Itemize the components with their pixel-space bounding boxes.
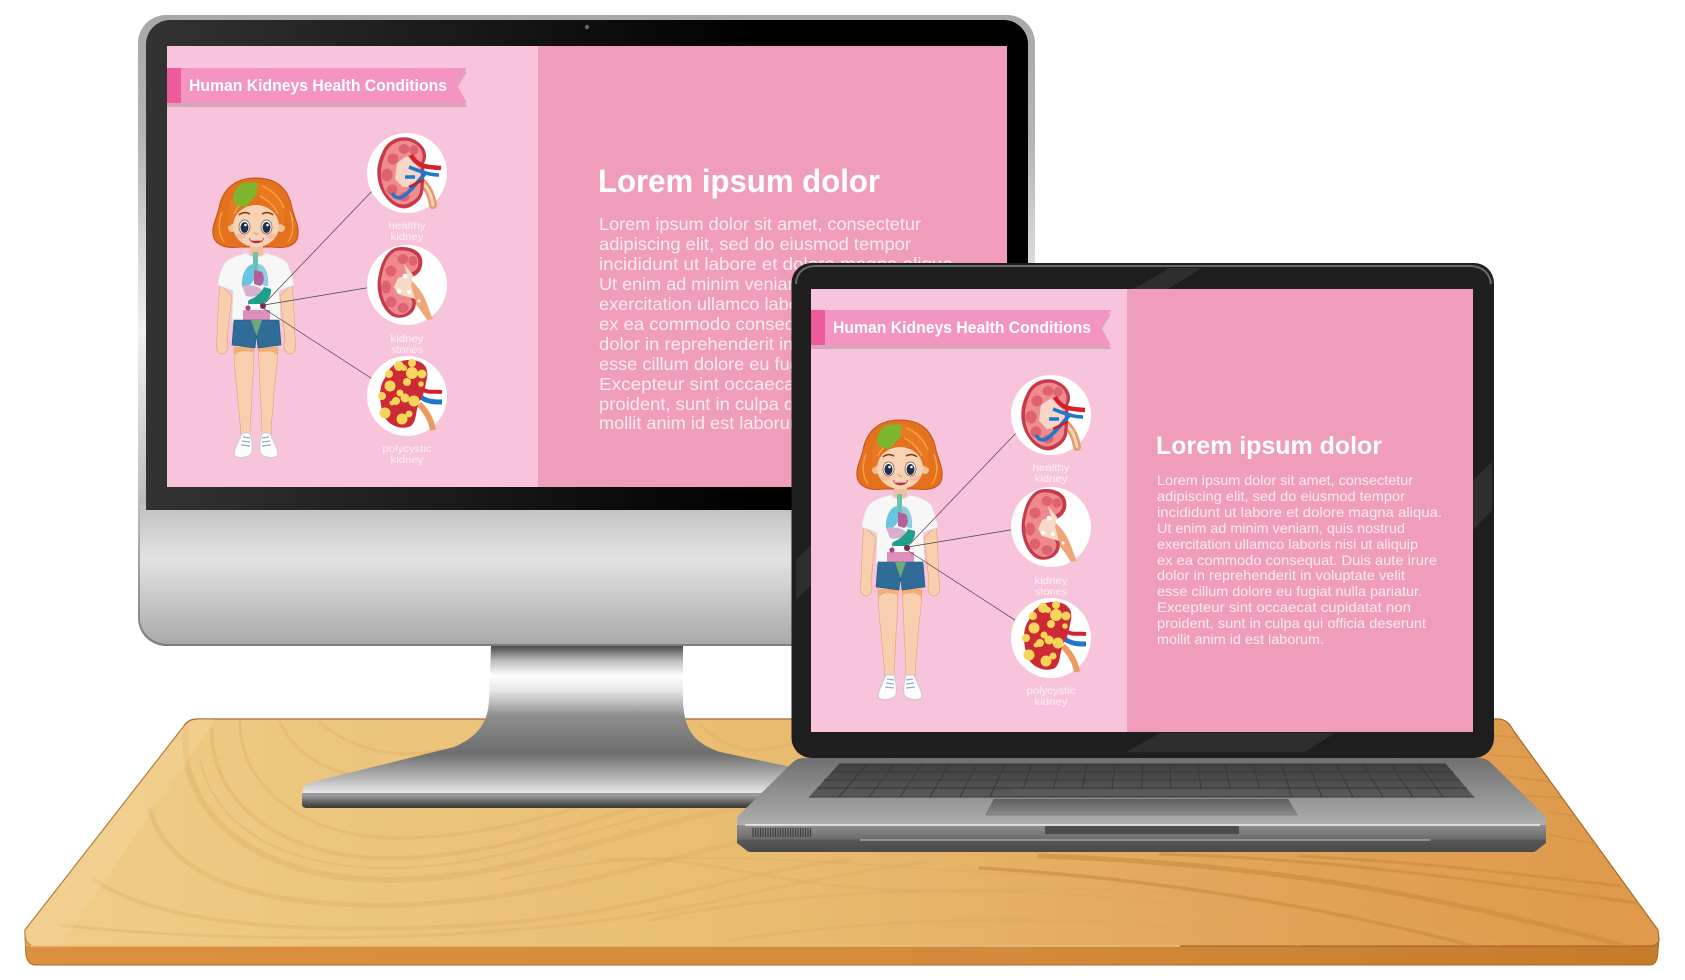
laptop base deck — [737, 758, 1546, 825]
monitor kidney: healthy: kidney — [390, 232, 424, 243]
desk front light edge — [30, 945, 1180, 947]
desk — [25, 719, 1659, 965]
laptop body text: adipiscing elit, sed do eiusmod tempor — [1157, 488, 1405, 504]
laptop kidney: healthy: kidney — [1034, 474, 1068, 485]
laptop kidney: stones: stones — [1035, 587, 1067, 598]
monitor body text: adipiscing elit, sed do eiusmod tempor — [599, 234, 911, 254]
monitor screen: left panel — [167, 46, 538, 487]
laptop girl anatomy figure — [857, 420, 942, 700]
monitor kidney: stones: stones — [391, 345, 423, 356]
laptop body text: Lorem ipsum dolor sit amet, consectetur — [1157, 472, 1413, 488]
monitor body text: ex ea commodo consequat. Duis aute irure — [599, 314, 951, 334]
monitor title banner — [167, 68, 467, 107]
laptop kidney: stones — [1011, 487, 1091, 598]
monitor body text: Lorem ipsum dolor sit amet, consectetur — [599, 214, 921, 234]
monitor body text: Ut enim ad minim veniam, quis nostrud — [599, 274, 911, 294]
webcam — [585, 25, 589, 29]
monitor title banner: Human Kidneys Health Conditions — [189, 77, 447, 95]
laptop pointer lines — [907, 430, 1022, 625]
laptop trackpad — [986, 799, 1297, 815]
monitor kidney: healthy: healthy — [388, 221, 426, 232]
monitor kidney: stones: kidney — [390, 334, 424, 345]
laptop body text: mollit anim id est laborum. — [1157, 631, 1324, 647]
monitor body text: mollit anim id est laborum. — [599, 413, 810, 433]
monitor body text: Excepteur sint occaecat cupidatat non — [599, 374, 919, 394]
laptop kidney: stones: kidney — [1034, 576, 1068, 587]
stand neck and foot — [302, 646, 872, 796]
monitor body text: esse cillum dolore eu fugiat nulla pariatur. — [599, 354, 933, 374]
laptop body text: esse cillum dolore eu fugiat nulla pariatur. — [1157, 583, 1422, 599]
laptop lid — [792, 263, 1494, 758]
laptop body text: proident, sunt in culpa qui officia deserunt — [1157, 615, 1426, 631]
laptop kidney: polycystic: polycystic — [1026, 686, 1076, 697]
monitor kidney: polycystic — [367, 356, 447, 466]
laptop kidney: polycystic: kidney — [1034, 697, 1068, 708]
laptop front notch — [1045, 826, 1239, 834]
monitor heading: Lorem ipsum dolor — [598, 163, 880, 199]
monitor body text: incididunt ut labore et dolore magna aliqua. — [599, 254, 958, 274]
desktop monitor — [138, 15, 1035, 646]
laptop screen: left panel — [811, 289, 1127, 732]
monitor body text: exercitation ullamco laboris nisi ut aliquip — [599, 294, 928, 314]
laptop kidney: healthy: healthy — [1032, 463, 1070, 474]
laptop kidney: polycystic — [1011, 598, 1091, 708]
laptop body text: incididunt ut labore et dolore magna aliqua. — [1157, 504, 1442, 520]
laptop title banner — [811, 310, 1111, 349]
laptop body text: Ut enim ad minim veniam, quis nostrud — [1157, 520, 1405, 536]
monitor chin — [140, 505, 1033, 644]
laptop base front — [737, 825, 1546, 852]
laptop lid rim — [796, 266, 1491, 284]
monitor black bezel — [146, 20, 1028, 510]
laptop body text: exercitation ullamco laboris nisi ut aliquip — [1157, 536, 1418, 552]
monitor stand — [302, 646, 872, 808]
monitor body text — [599, 214, 958, 433]
monitor pointer lines — [263, 188, 378, 383]
monitor girl anatomy figure — [213, 178, 298, 458]
monitor kidney: polycystic: polycystic — [382, 444, 432, 455]
laptop body text — [1157, 472, 1442, 647]
laptop screen: right panel — [1127, 289, 1473, 732]
laptop — [737, 263, 1546, 852]
monitor kidney: stones — [367, 245, 447, 356]
monitor body text: dolor in reprehenderit in voluptate velit — [599, 334, 911, 354]
laptop front highlight — [745, 824, 1540, 826]
monitor body text: proident, sunt in culpa qui officia deserunt — [599, 394, 938, 414]
wood grain — [25, 719, 1650, 950]
desk top surface — [25, 719, 1659, 946]
monitor screen: right panel — [538, 46, 1007, 487]
laptop title banner: Human Kidneys Health Conditions — [833, 319, 1091, 337]
laptop kidney: healthy — [1011, 375, 1091, 485]
laptop keyboard — [809, 764, 1474, 797]
monitor silver casing — [138, 15, 1035, 646]
laptop bezel reflections — [796, 268, 1492, 752]
desk front edge — [25, 938, 1659, 965]
laptop speaker vent — [753, 828, 810, 837]
laptop body text: ex ea commodo consequat. Duis aute irure — [1157, 552, 1437, 568]
monitor kidney: healthy — [367, 133, 447, 243]
laptop body text: Excepteur sint occaecat cupidatat non — [1157, 599, 1411, 615]
laptop body text: dolor in reprehenderit in voluptate velit — [1157, 567, 1405, 583]
monitor kidney: polycystic: kidney — [390, 455, 424, 466]
laptop heading: Lorem ipsum dolor — [1156, 432, 1382, 460]
stand foot front edge — [302, 793, 872, 808]
